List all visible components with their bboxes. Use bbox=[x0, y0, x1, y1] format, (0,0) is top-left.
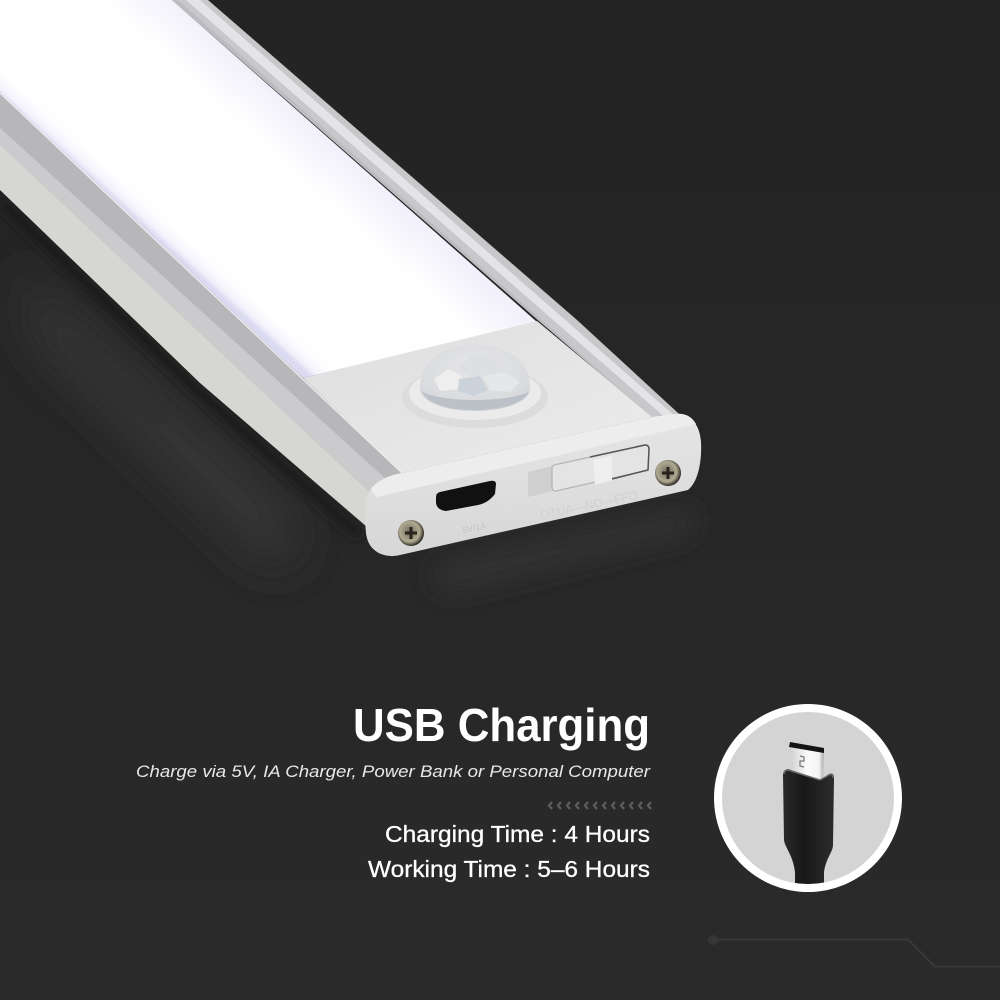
subtitle: Charge via 5V, IA Charger, Power Bank or Personal Computer bbox=[136, 763, 652, 781]
screw left bbox=[398, 520, 424, 546]
title: USB Charging bbox=[353, 699, 650, 751]
working time: Working Time : 5–6 Hours bbox=[368, 856, 650, 882]
black plug body and cable bbox=[783, 769, 834, 890]
reflection under light bar bbox=[0, 200, 695, 592]
product: LED light bar bbox=[0, 0, 701, 556]
glowing white diffuser panel bbox=[0, 0, 537, 378]
text block bbox=[136, 699, 652, 882]
sensor end plate bbox=[303, 321, 652, 473]
slide switch bbox=[552, 445, 649, 491]
icon: micro USB connector in circle bbox=[714, 704, 902, 892]
chevron divider bbox=[549, 802, 651, 809]
PIR motion sensor bbox=[402, 345, 548, 428]
screw right bbox=[655, 460, 681, 486]
connector metal tip bbox=[789, 742, 824, 780]
end cap bbox=[365, 414, 701, 556]
slide switch recess bbox=[528, 466, 553, 497]
far silver rail bbox=[172, 0, 690, 424]
micro USB port bbox=[436, 481, 496, 511]
charging time: Charging Time : 4 Hours bbox=[385, 821, 650, 847]
switch marking: OTUA—NO—FFO bbox=[539, 488, 639, 522]
voltage marking: 5V/1A bbox=[461, 521, 487, 536]
decorative circuit line bbox=[708, 935, 1000, 966]
outer silver side rail bbox=[0, 88, 402, 527]
